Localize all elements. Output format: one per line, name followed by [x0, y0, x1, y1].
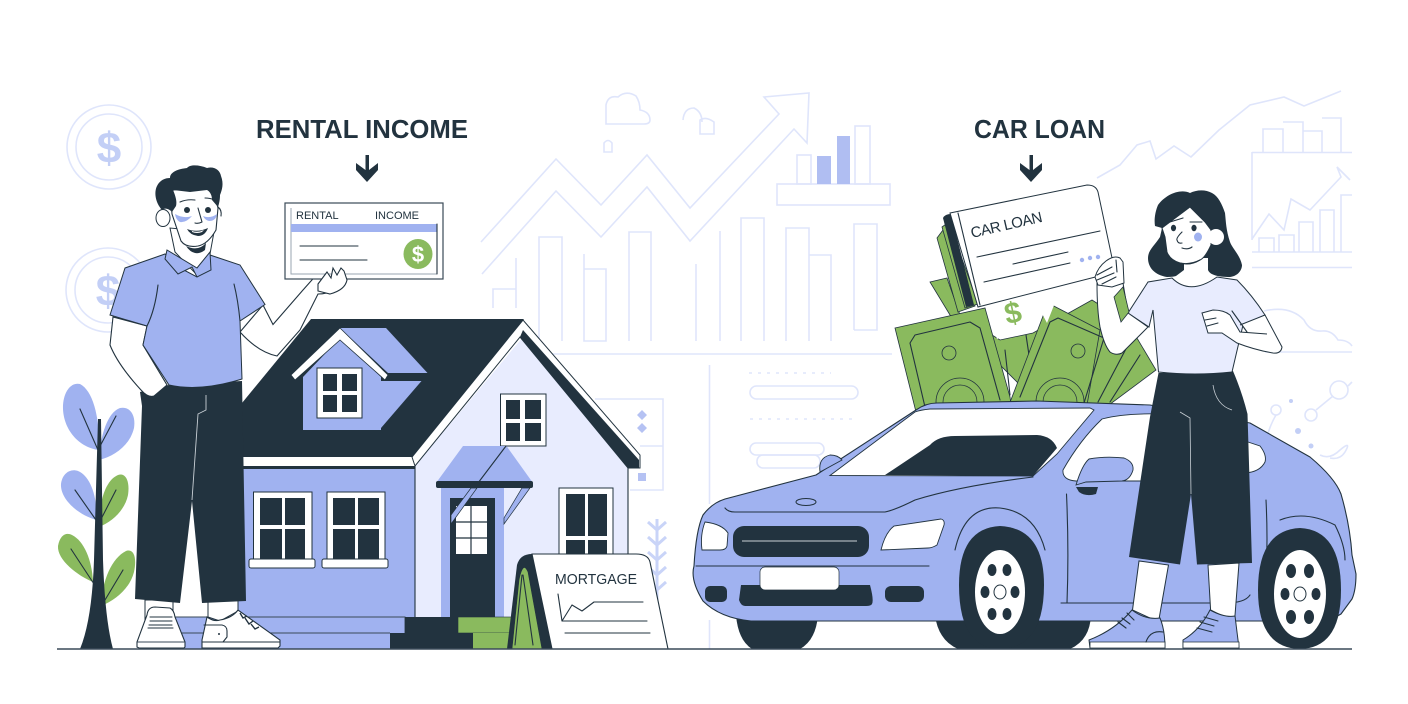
front wheel: [955, 508, 1045, 649]
folder pages: [937, 226, 975, 312]
arrow: down to car loan: [1020, 155, 1042, 182]
icon: dollar seal: [404, 239, 432, 269]
holding hand: [1095, 257, 1124, 287]
other arm: [1202, 310, 1282, 353]
faint panel behind house: [595, 399, 663, 490]
check labels: RENTAL: [296, 210, 339, 222]
hair back: [1148, 190, 1242, 277]
legs: [1132, 561, 1239, 622]
man's hand on check: [318, 268, 347, 294]
stack of banknotes: [895, 278, 1156, 426]
car body: [693, 401, 1356, 621]
leaves: [58, 384, 135, 606]
neck: [170, 228, 214, 275]
icon: clouds: [604, 93, 714, 152]
face: [171, 187, 218, 246]
faint network nodes: [1266, 381, 1352, 458]
right sneaker: [1183, 610, 1239, 648]
sign label: MORTGAGE: [555, 572, 637, 588]
man: [110, 165, 280, 648]
document dots: [1080, 255, 1100, 262]
note right: [1009, 303, 1104, 426]
rear window: [1245, 441, 1265, 473]
windshield: [830, 408, 1094, 476]
dormer: [291, 328, 428, 430]
trousers: [1129, 371, 1252, 564]
left window 2: [322, 492, 388, 568]
body lines: [696, 477, 1267, 603]
faint right bar chart: [1252, 118, 1352, 268]
facial features: [175, 198, 217, 236]
side mirror: [1076, 457, 1133, 495]
car loan document: [937, 185, 1115, 339]
front gable wall: [415, 337, 628, 617]
ear: [1208, 229, 1224, 245]
document lines: [977, 231, 1100, 282]
far ear: [218, 207, 221, 216]
icon: dollar seal: $: [412, 242, 424, 267]
trousers: [135, 381, 246, 603]
collar: [165, 250, 211, 277]
heading: rental income: RENTAL INCOME: [256, 114, 468, 144]
grille: [733, 526, 869, 557]
icon: dollar coin lower: $: [96, 267, 120, 316]
back notes: [930, 278, 1156, 405]
faint bar chart center: [493, 218, 892, 649]
car: [693, 401, 1356, 649]
headlights: [701, 519, 944, 550]
sign board: [532, 554, 668, 649]
fascia: [242, 457, 412, 466]
sign chart: [558, 594, 650, 633]
arrow: down to check: [356, 155, 378, 182]
man's raised arm: [240, 268, 346, 356]
neck shadow: [186, 243, 206, 253]
steps: [173, 617, 536, 649]
woman: [1089, 190, 1282, 648]
shirt: [110, 250, 265, 387]
left sneaker: [1089, 610, 1165, 648]
left wall: [238, 468, 415, 617]
windshield shadow: [885, 435, 1057, 476]
document title: CAR LOAN: [969, 209, 1044, 242]
sign easel: [507, 554, 552, 649]
shirt: [1128, 277, 1265, 374]
lower paper with dollar: $: [1002, 296, 1025, 331]
hair: [155, 165, 223, 212]
rear and front tyres: [736, 615, 1091, 649]
rear wheel: [1258, 516, 1345, 649]
icon: dollar coin top: [67, 105, 151, 189]
rental check: [285, 203, 443, 279]
icon: dollar coin top: $: [97, 124, 121, 173]
check labels: INCOME: [375, 210, 419, 222]
mortgage sign: [507, 554, 668, 649]
holding arm: [1097, 283, 1148, 354]
face: [1162, 207, 1211, 264]
left shoe: [137, 607, 185, 648]
gable window: [500, 394, 546, 446]
veins: [71, 409, 123, 605]
left window 1: [249, 492, 315, 568]
note left: [895, 308, 1012, 426]
facial features: [1170, 218, 1202, 264]
faint background chart scene: [66, 91, 1352, 649]
green cuff: [1114, 287, 1129, 322]
left arm: [110, 317, 167, 396]
porch and door: [436, 446, 533, 617]
lower paper with dollar: [985, 290, 1060, 339]
licence plate: [760, 567, 839, 590]
faint fern: [648, 519, 666, 600]
heading: car loan: CAR LOAN: [974, 114, 1105, 144]
check labels: [296, 210, 419, 222]
legs: [145, 600, 238, 621]
rising zigzag arrow: [481, 93, 809, 274]
side window: [1063, 414, 1160, 481]
lower intakes: [705, 585, 924, 606]
icon: dollar coin lower: [66, 248, 150, 332]
faint text lines: [749, 373, 858, 468]
right shoe: [202, 610, 280, 648]
house: [173, 319, 640, 649]
faint cloud right: [1264, 309, 1352, 352]
check band: [291, 224, 437, 232]
faint small bar chart with filled bars: [777, 126, 890, 205]
document page: [950, 185, 1115, 307]
neck: [1172, 258, 1217, 290]
emblem: [796, 498, 816, 506]
gable trim: [412, 320, 640, 468]
roof: [242, 319, 524, 457]
faint trend line right: [1097, 91, 1341, 178]
right window: [559, 488, 613, 560]
ear: [156, 210, 170, 226]
plant: [58, 384, 135, 649]
stem: [80, 419, 113, 649]
near mirror: [820, 455, 842, 472]
ground line: [57, 648, 1352, 650]
